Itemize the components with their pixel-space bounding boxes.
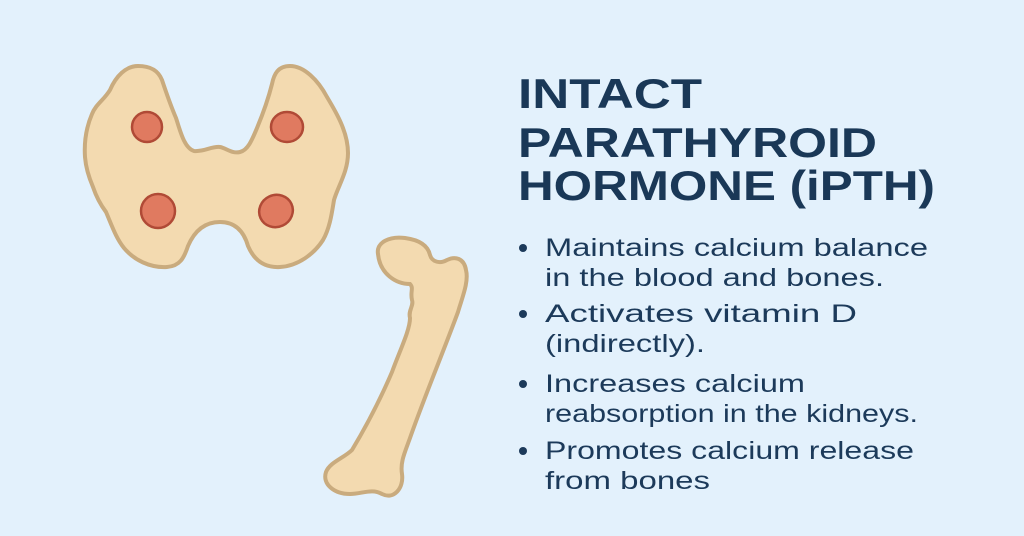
parathyroid gland: upper right (271, 112, 303, 142)
title: HORMONE (iPTH) (518, 162, 935, 209)
bullet 2: (indirectly). (545, 330, 705, 358)
bullet list (519, 234, 928, 495)
title: PARATHYROID (518, 119, 877, 166)
bullet 1: Maintains calcium balance (545, 234, 928, 262)
bullet 1: in the blood and bones. (545, 264, 884, 292)
bullet 3 (519, 370, 918, 428)
icon: femur bone (325, 238, 467, 496)
bullet 4: Promotes calcium release (545, 437, 914, 465)
bullet 4 (519, 437, 914, 495)
bullet 3: Increases calcium (545, 370, 805, 398)
parathyroid gland: lower left (141, 194, 175, 228)
bullet 2 (519, 300, 857, 358)
title (518, 70, 935, 209)
parathyroid gland: upper left (132, 112, 162, 142)
title: INTACT (518, 70, 702, 117)
bullet 4: from bones (545, 467, 710, 495)
icon: thyroid with parathyroid glands (85, 66, 348, 267)
bullet 2: Activates vitamin D (545, 300, 857, 328)
bullet 3: reabsorption in the kidneys. (545, 400, 918, 428)
bullet 1 (519, 234, 928, 292)
parathyroid gland: lower right (254, 189, 298, 233)
